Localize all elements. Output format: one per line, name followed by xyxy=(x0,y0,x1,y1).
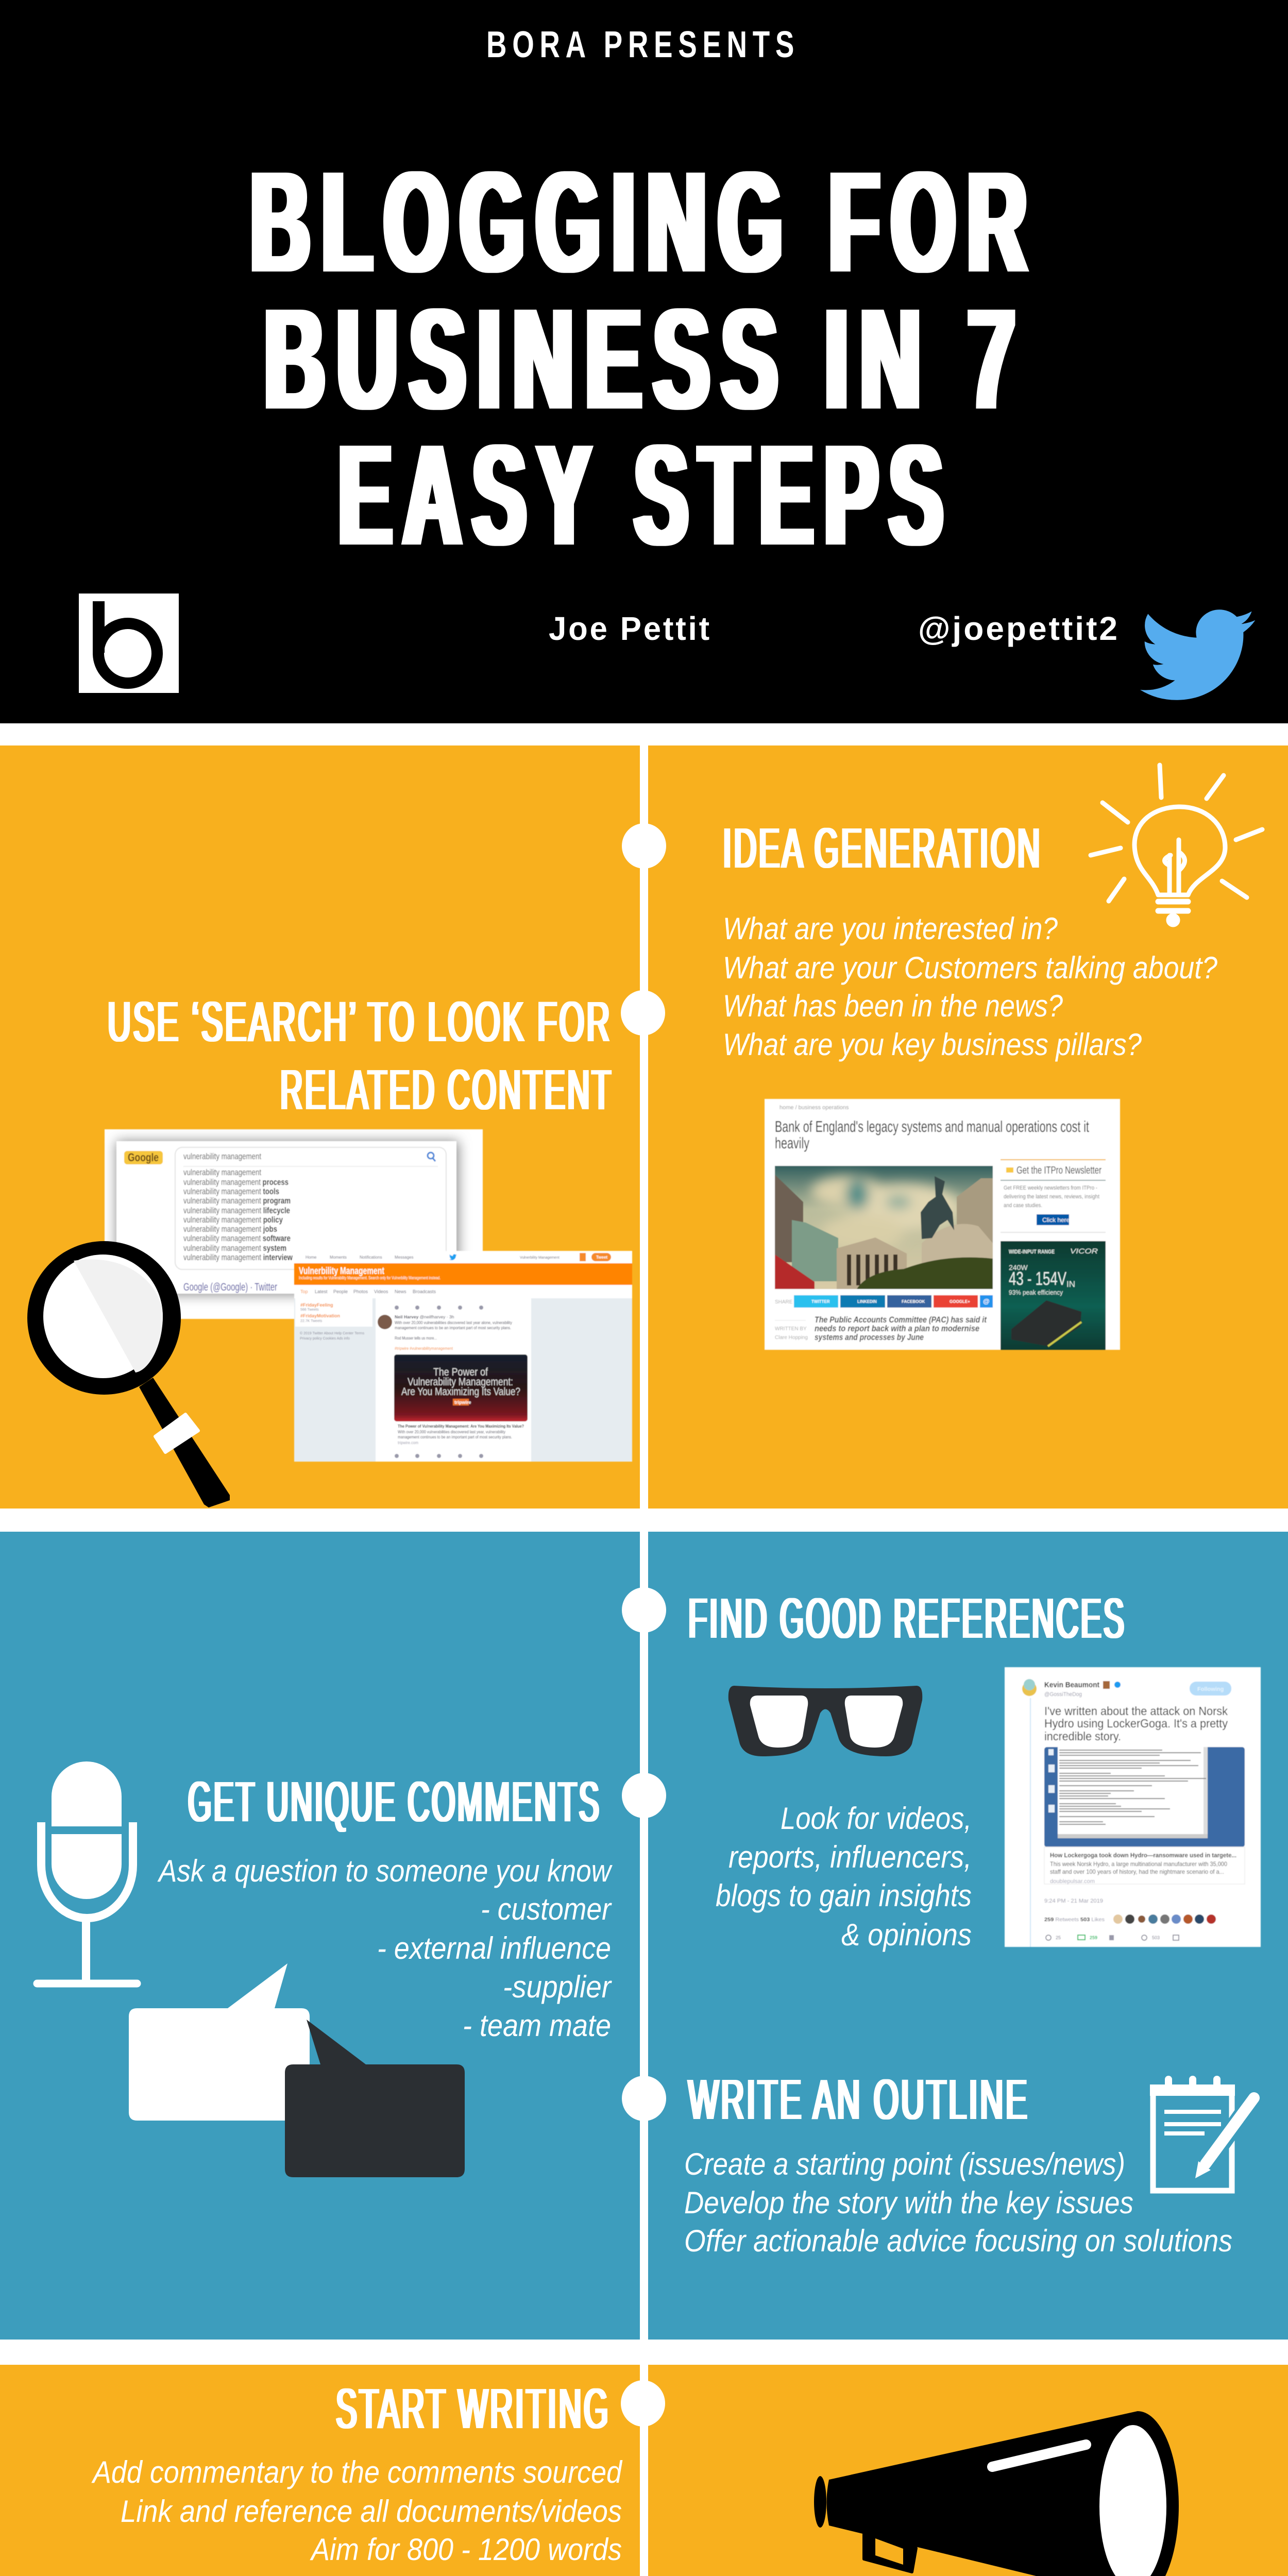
screenshot: bank of england article: LINKEDIN xyxy=(857,1299,877,1304)
screenshot: google search: vulnerability management software xyxy=(183,1233,291,1243)
screenshot: tweet: 503 xyxy=(1152,1935,1160,1940)
icon: glasses xyxy=(728,1686,922,1756)
text: idea questions xyxy=(723,911,1218,1062)
screenshot: twitter search: © 2019 Twitter About Help Center Terms xyxy=(300,1331,365,1335)
screenshot: bank of england article: heavily xyxy=(775,1134,809,1152)
text: ask a question: - external influence xyxy=(377,1931,611,1965)
text: idea questions: What are your Customers talking about? xyxy=(723,951,1218,985)
text: look for videos: & opinions xyxy=(841,1918,972,1952)
text: outline steps xyxy=(684,2147,1232,2258)
text: ask a question: Ask a question to someone you know xyxy=(157,1854,613,1888)
screenshot: google search: vulnerability management program xyxy=(183,1196,291,1206)
screenshot: twitter search: With over 20,000 vulnerabilities discovered last year, vulnerability xyxy=(398,1429,506,1434)
screenshot: bank of england article: WIDE-INPUT RANGE xyxy=(1009,1249,1055,1255)
text: look for videos: Look for videos, xyxy=(781,1801,972,1836)
screenshot: tweet: doublepulsar.com xyxy=(1050,1878,1095,1885)
screenshot: bank of england article: @ xyxy=(983,1297,990,1305)
screenshot: twitter search: #FridayFeeling xyxy=(300,1302,333,1308)
screenshot: twitter search: management continues to be an important part of most security plans. xyxy=(395,1325,511,1330)
timeline dot xyxy=(621,2380,665,2427)
twitter handle: @joepettit2 xyxy=(918,610,1120,647)
screenshot: google search: vulnerability management xyxy=(183,1151,261,1161)
screenshot: twitter search: Are You Maximizing Its Value? xyxy=(401,1386,520,1398)
screenshot: bank of england article: Click here xyxy=(1042,1216,1070,1224)
screenshot: bank of england article: VICOR xyxy=(1070,1247,1098,1255)
screenshot: google search: vulnerability management lifecycle xyxy=(183,1206,290,1215)
screenshot: google search: vulnerability management system xyxy=(183,1243,286,1253)
text: writing steps xyxy=(91,2455,623,2576)
screenshot: bank of england article: systems and processes by June xyxy=(815,1332,924,1342)
screenshot: bank of england article: TWITTER xyxy=(811,1299,830,1304)
heading: use search: USE ‘SEARCH’ TO LOOK FOR xyxy=(108,990,612,1054)
screenshot: twitter search: 566 Tweets xyxy=(300,1308,319,1312)
text: ask a question: -supplier xyxy=(503,1970,612,2004)
screenshot: tweet: Kevin Beaumont xyxy=(1044,1681,1099,1689)
text: ask a question xyxy=(157,1854,613,2043)
screenshot: twitter search xyxy=(294,1251,632,1462)
screenshot: twitter search: People xyxy=(333,1289,348,1294)
text: writing steps: Link and reference all documents/videos xyxy=(121,2494,622,2529)
screenshot: tweet: 25 xyxy=(1056,1935,1061,1940)
screenshot: twitter search: Top xyxy=(300,1289,308,1294)
screenshot: google search: vulnerability management policy xyxy=(183,1215,283,1225)
text: idea questions: What are you interested in? xyxy=(723,911,1058,946)
icon: megaphone xyxy=(814,2411,1179,2576)
screenshot: twitter search: tripwire.com xyxy=(398,1440,418,1445)
screenshot: tweet: 259 Retweets 503 Likes xyxy=(1044,1917,1105,1923)
timeline dot xyxy=(622,823,666,869)
screenshot: google search: vulnerability management process xyxy=(183,1177,289,1187)
screenshot: bank of england article: IN xyxy=(1066,1279,1075,1289)
screenshot: bank of england article: WRITTEN BY xyxy=(775,1326,807,1332)
screenshot: twitter search: With over 20,000 vulnerabilities discovered last year alone, vulnerability xyxy=(395,1320,513,1325)
screenshot: twitter search: Vulnerbility Management xyxy=(520,1256,560,1260)
icon: microphone xyxy=(37,1761,137,1984)
screenshot: twitter search: tripwire xyxy=(454,1400,471,1405)
screenshot: twitter search: management continues to be an important part of most security plans. xyxy=(398,1434,512,1439)
screenshot: bank of england article: GOOGLE+ xyxy=(950,1299,970,1304)
panel: blue section xyxy=(0,1532,1288,2340)
screenshot: bank of england article: home / business operations xyxy=(779,1105,849,1111)
screenshot: google search xyxy=(105,1129,483,1319)
screenshot: twitter search: Including results for Vulnerability Management. Search only for Vulnerbility Management instead. xyxy=(299,1276,440,1280)
screenshot: bank of england article xyxy=(765,1099,1120,1350)
text: outline steps: Create a starting point (issues/news) xyxy=(684,2147,1125,2181)
screenshot: twitter search: Moments xyxy=(330,1255,347,1260)
timeline dot xyxy=(622,1587,666,1633)
screenshot: tweet: This week Norsk Hydro, a large multinational manufacturer with 35,000 xyxy=(1050,1860,1227,1868)
screenshot: tweet: Following xyxy=(1197,1686,1224,1692)
heading: get unique comments: GET UNIQUE COMMENTS xyxy=(188,1770,601,1834)
screenshot: tweet: incredible story. xyxy=(1044,1730,1121,1743)
screenshot: twitter search: Neil Harvey @neilfharvey · 3h xyxy=(395,1314,454,1319)
screenshot: google search: vulnerability management interview xyxy=(183,1252,293,1262)
screenshot: twitter search: Vulnerability Management: xyxy=(408,1376,513,1388)
heading: write an outline: WRITE AN OUTLINE xyxy=(688,2068,1029,2131)
screenshot: bank of england article: SHARE xyxy=(775,1299,793,1305)
title xyxy=(250,142,1039,575)
screenshot: bank of england article: and case studies. xyxy=(1004,1202,1042,1209)
timeline dot xyxy=(622,2076,666,2121)
screenshot: twitter search: Rod Musser tells us more... xyxy=(395,1335,437,1341)
screenshot: google search: vulnerability management xyxy=(183,1167,261,1177)
screenshot: google search: vulnerability management jobs xyxy=(183,1224,277,1234)
screenshot: tweet: I've written about the attack on Norsk xyxy=(1044,1704,1228,1718)
screenshot: twitter search: Privacy policy Cookies Ads info xyxy=(300,1337,350,1341)
screenshot: twitter search: 22.7K Tweets xyxy=(300,1319,323,1323)
screenshot: twitter search: #tripwire #vulnerabilitymanagement xyxy=(395,1346,453,1351)
screenshot: tweet xyxy=(1005,1667,1261,1947)
screenshot: bank of england article: Bank of England's legacy systems and manual operations cost it xyxy=(775,1117,1089,1136)
screenshot: bank of england article: Clare Hopping xyxy=(775,1335,808,1341)
presenter line: BORA PRESENTS xyxy=(486,24,800,65)
panel: yellow section one xyxy=(0,745,1288,1509)
text: look for videos xyxy=(716,1801,972,1952)
heading: use search xyxy=(108,990,613,1122)
icon: light bulb xyxy=(1091,765,1262,925)
screenshot: tweet: @GossiTheDog xyxy=(1044,1691,1082,1698)
screenshot: tweet: 9:24 PM - 21 Mar 2019 xyxy=(1044,1898,1103,1904)
screenshot: bank of england article: The Public Accounts Committee (PAC) has said it xyxy=(815,1315,987,1325)
screenshot: bank of england article: 93% peak efficiency xyxy=(1009,1289,1063,1296)
heading: use search: RELATED CONTENT xyxy=(280,1058,613,1122)
icon: magnifying glass xyxy=(27,1241,230,1507)
screenshot: twitter search: Videos xyxy=(374,1289,388,1294)
screenshot: bank of england article: 43 - 154V xyxy=(1009,1268,1066,1289)
screenshot: twitter search: Photos xyxy=(353,1289,368,1294)
text: look for videos: blogs to gain insights xyxy=(716,1878,972,1913)
screenshot: twitter search: The Power of xyxy=(433,1366,488,1378)
panel: yellow section two xyxy=(0,2365,1288,2576)
screenshot: bank of england article: 240W xyxy=(1009,1263,1028,1272)
panel: header xyxy=(0,0,1288,723)
screenshot: bank of england article: Get the ITPro Newsletter xyxy=(1016,1165,1101,1176)
text: outline steps: Develop the story with the key issues xyxy=(684,2185,1133,2220)
screenshot: google search: Google xyxy=(128,1151,159,1164)
screenshot: twitter search: News xyxy=(395,1289,406,1294)
screenshot: google search: vulnerability management tools xyxy=(183,1187,279,1196)
timeline dot xyxy=(621,990,665,1036)
author name: Joe Pettit xyxy=(549,610,711,647)
screenshot: twitter search: Tweet xyxy=(596,1255,607,1260)
heading: start writing: START WRITING xyxy=(336,2377,611,2441)
icon: speech bubbles xyxy=(129,1963,465,2177)
text: idea questions: What has been in the news? xyxy=(723,989,1063,1023)
screenshot: twitter search: Messages xyxy=(395,1255,413,1260)
screenshot: bank of england article: FACEBOOK xyxy=(902,1299,925,1304)
screenshot: bank of england article: delivering the latest news, reviews, insight xyxy=(1004,1194,1099,1200)
heading: idea generation: IDEA GENERATION xyxy=(723,817,1042,880)
screenshot: bank of england article: Get FREE weekly newsletters from ITPro - xyxy=(1004,1185,1097,1191)
timeline dot xyxy=(622,1773,666,1818)
screenshot: tweet: staff and over 100 years of history, had the nightmare scenario of a... xyxy=(1050,1868,1224,1875)
text: outline steps: Offer actionable advice focusing on solutions xyxy=(684,2224,1232,2258)
screenshot: twitter search: Broadcasts xyxy=(413,1289,436,1294)
screenshot: tweet: How Lockergoga took down Hydro—ransomware used in targete... xyxy=(1050,1852,1236,1859)
icon: Bora logo xyxy=(79,594,179,693)
photo: bank of england xyxy=(775,1166,993,1289)
text: ask a question: - team mate xyxy=(463,2008,611,2043)
screenshot: twitter search: Notifications xyxy=(360,1255,382,1260)
screenshot: twitter search: The Power of Vulnerability Management: Are You Maximizing Its Value? xyxy=(398,1423,524,1429)
screenshot: bank of england article: needs to report back with a plan to modernise xyxy=(815,1324,979,1333)
text: idea questions: What are you key business pillars? xyxy=(723,1027,1142,1062)
screenshot: twitter search: #FridayMotivation xyxy=(300,1313,340,1318)
screenshot: twitter search: Home xyxy=(306,1255,317,1260)
screenshot: twitter search: Latest xyxy=(315,1289,328,1294)
screenshot: tweet: Hydro using LockerGoga. It's a pretty xyxy=(1044,1717,1228,1730)
text: look for videos: reports, influencers, xyxy=(728,1840,972,1874)
icon: notepad xyxy=(1150,2079,1254,2191)
text: ask a question: - customer xyxy=(481,1892,612,1926)
screenshot: tweet: 259 xyxy=(1090,1935,1097,1940)
screenshot: twitter search: Vulnerbility Management xyxy=(299,1266,384,1277)
icon: twitter bird xyxy=(1140,609,1255,700)
screenshot: google search: Google (@Google) · Twitter xyxy=(183,1281,277,1293)
text: writing steps: Aim for 800 - 1200 words xyxy=(310,2532,622,2567)
text: writing steps: Add commentary to the comments sourced xyxy=(91,2455,622,2489)
